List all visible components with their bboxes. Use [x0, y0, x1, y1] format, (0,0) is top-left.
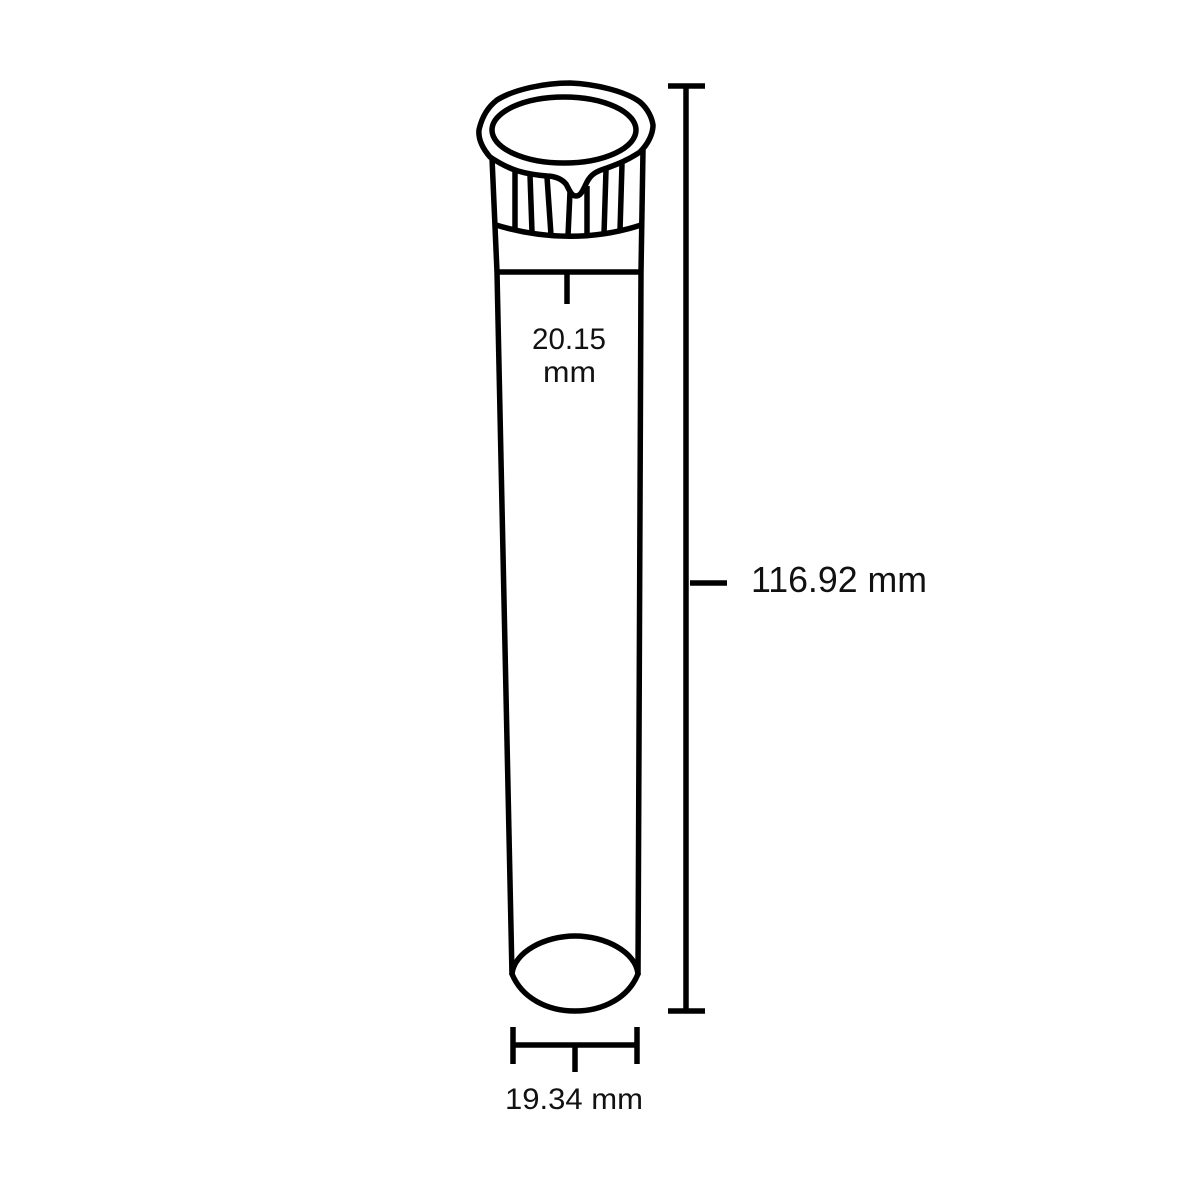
bottom width label: 19.34 mm [505, 1083, 643, 1116]
top width label: mm [543, 356, 596, 389]
neck line [497, 269, 641, 275]
bottom width dimension bracket [513, 1027, 637, 1072]
top width label [532, 323, 606, 389]
cap ribs [515, 164, 622, 236]
cap lip outer [479, 83, 653, 196]
tube illustration [479, 83, 653, 1011]
tube bottom opening [512, 936, 638, 1011]
height label: 116.92 mm [751, 559, 927, 600]
height dimension bracket [668, 86, 727, 1011]
top width tick [564, 272, 570, 304]
tube body walls [492, 150, 643, 975]
cap opening ellipse [492, 97, 636, 163]
top width label: 20.15 [532, 323, 606, 356]
cap lower edge [496, 225, 641, 236]
